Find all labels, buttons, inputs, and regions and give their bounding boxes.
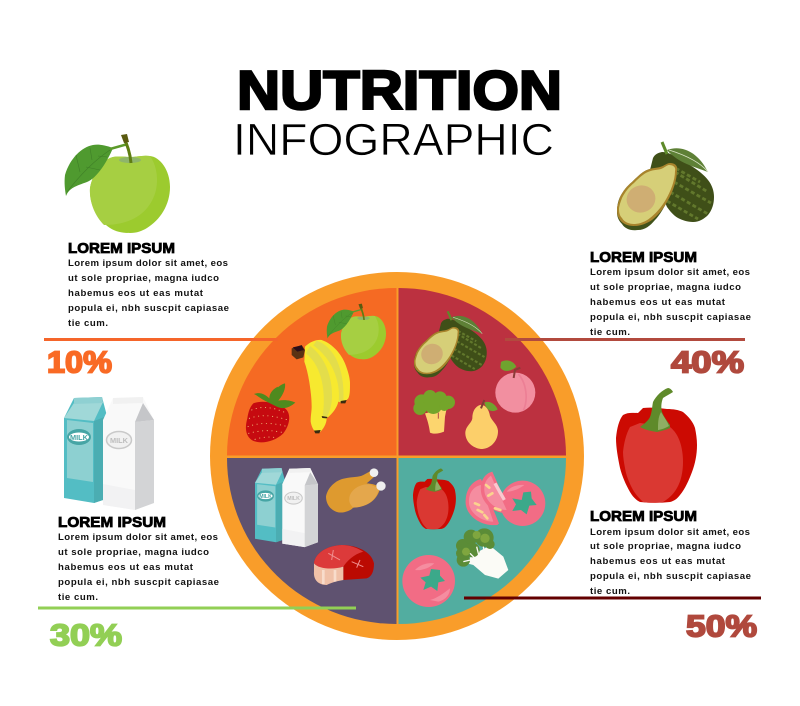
icon: milk cartons — [64, 397, 154, 510]
leader line — [44, 338, 278, 341]
food: pear — [465, 400, 498, 449]
callout: bottom right — [464, 508, 761, 644]
food: small apple — [327, 304, 386, 359]
leader line — [464, 596, 761, 600]
heading: LOREM IPSUM — [590, 249, 697, 266]
body text: habemus eos ut eas mutat — [68, 288, 204, 299]
sector: orange fruit — [227, 288, 396, 456]
body text: tie cum. — [58, 592, 98, 603]
food: small avocado — [414, 311, 487, 377]
food: sliced tomato — [466, 472, 510, 525]
body text: popula ei, nbh suscpit capiasae — [590, 312, 751, 323]
body text: Lorem ipsum dolor sit amet, eos — [590, 267, 750, 278]
title line: nutrition: NUTRITION — [237, 59, 562, 121]
leader line — [38, 606, 356, 610]
body text: habemus eos ut eas mutat — [590, 556, 726, 567]
food: strawberry — [246, 383, 295, 442]
body text: Lorem ipsum dolor sit amet, eos — [590, 527, 750, 538]
body text: habemus eos ut eas mutat — [58, 562, 194, 573]
sector: teal vegetables — [398, 458, 566, 624]
body text — [590, 527, 751, 597]
heading: LOREM IPSUM — [68, 240, 175, 257]
food: bananas — [292, 340, 350, 433]
sector: red fruit — [398, 288, 566, 456]
food: small red pepper — [413, 468, 456, 529]
food: whole tomato right — [500, 481, 545, 526]
body text: ut sole propriae, magna iudco — [590, 282, 741, 293]
sector: purple dairy and protein — [227, 458, 396, 624]
body text: Lorem ipsum dolor sit amet, eos — [58, 532, 218, 543]
food: roast chicken — [326, 468, 386, 513]
leader line — [505, 338, 745, 341]
percentage: 40%: 40% — [671, 344, 744, 380]
icon: avocado — [617, 142, 714, 230]
percentage: 10%: 10% — [47, 344, 112, 380]
body text: habemus eos ut eas mutat — [590, 297, 726, 308]
food: broccoli — [456, 528, 508, 579]
divider: horizontal — [227, 456, 566, 458]
body text — [58, 532, 219, 603]
body text: popula ei, nbh suscpit capiasae — [590, 571, 751, 582]
food: small milk cartons — [255, 468, 318, 547]
icon: red pepper — [616, 388, 697, 503]
body text: Lorem ipsum dolor sit amet, eos — [68, 258, 228, 269]
body text: tie cum. — [68, 318, 108, 329]
divider: vertical — [396, 288, 398, 624]
food: cauliflower stalk — [413, 390, 455, 434]
food: whole tomato lower left — [402, 555, 455, 607]
body text: popula ei, nbh suscpit capiasae — [68, 303, 229, 314]
body text — [590, 267, 751, 338]
heading: LOREM IPSUM — [590, 508, 697, 525]
body text: ut sole propriae, magna iudco — [58, 547, 209, 558]
title line: infographic: INFOGRAPHIC — [233, 114, 554, 165]
callout: top left — [44, 240, 278, 380]
heading: LOREM IPSUM — [58, 514, 166, 531]
percentage: 30%: 30% — [50, 618, 122, 652]
callout: top right — [505, 249, 751, 380]
callout: bottom left — [38, 514, 356, 652]
food: steak — [314, 545, 374, 585]
plate chart — [210, 272, 584, 640]
food: peach — [495, 360, 535, 413]
body text: ut sole propriae, magna iudco — [590, 541, 741, 552]
body text: popula ei, nbh suscpit capiasae — [58, 577, 219, 588]
body text: ut sole propriae, magna iudco — [68, 273, 219, 284]
icon: green apple — [65, 134, 170, 233]
title — [233, 59, 562, 165]
plate ring — [210, 272, 584, 640]
body text: tie cum. — [590, 327, 630, 338]
body text: tie cum. — [590, 586, 630, 597]
percentage: 50%: 50% — [686, 608, 757, 644]
body text — [68, 258, 229, 329]
